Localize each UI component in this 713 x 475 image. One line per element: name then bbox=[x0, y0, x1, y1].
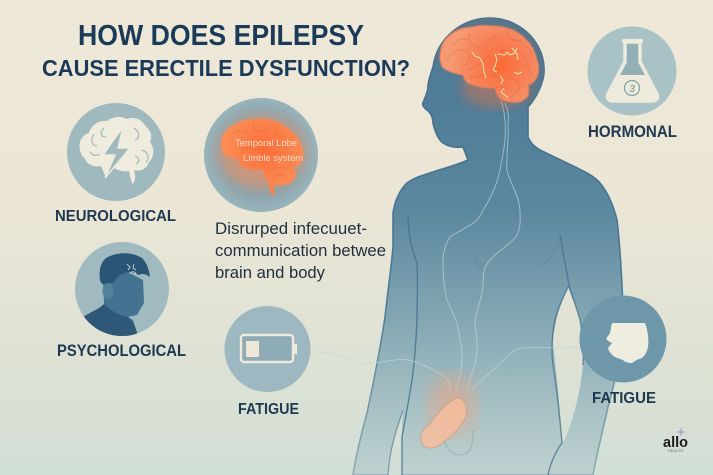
panel: fatigue left bbox=[224, 306, 310, 418]
arm gaps bbox=[553, 287, 583, 445]
logo: allo health: allo bbox=[663, 434, 688, 451]
logo: allo health bbox=[663, 427, 688, 453]
title bbox=[42, 20, 410, 81]
panel: fatigue right bbox=[580, 296, 666, 407]
circle with brain bbox=[204, 98, 318, 212]
label: NEUROLOGICAL bbox=[55, 208, 176, 225]
body silhouette bbox=[353, 18, 624, 475]
icon: low battery bbox=[224, 306, 310, 392]
title: HOW DOES EPILEPSY bbox=[78, 20, 364, 52]
icon: distressed man bbox=[75, 242, 169, 336]
nerve pathways bbox=[312, 100, 580, 393]
icon: fist bbox=[580, 296, 666, 382]
description text: Disrurped infecuuet- bbox=[215, 220, 367, 238]
icon: flask: 3 bbox=[629, 84, 635, 95]
label: HORMONAL bbox=[588, 123, 677, 141]
inner body lines bbox=[388, 217, 583, 475]
panel: temporal lobe bbox=[204, 98, 386, 282]
logo: allo health: HEALTH bbox=[668, 449, 683, 453]
brain folds bbox=[447, 30, 534, 98]
description text: brain and body bbox=[215, 264, 326, 282]
panel: psychological bbox=[57, 242, 186, 360]
title: CAUSE ERECTILE DYSFUNCTION? bbox=[42, 55, 410, 81]
description text bbox=[215, 220, 386, 282]
circle with brain: Limble system bbox=[243, 153, 303, 163]
panel: neurological bbox=[55, 103, 176, 225]
description text: communication betwee bbox=[215, 242, 386, 260]
label: PSYCHOLOGICAL bbox=[57, 342, 186, 360]
label: FATIGUE bbox=[592, 390, 656, 407]
glowing brain bbox=[440, 25, 538, 108]
label: FATIGUE bbox=[238, 401, 299, 418]
circle with brain: Temporal Lobe bbox=[235, 138, 297, 148]
icon: brain with lightning bbox=[67, 103, 165, 201]
seizure sparks bbox=[472, 48, 522, 98]
panel: hormonal bbox=[588, 26, 677, 141]
pelvic organ bbox=[421, 398, 473, 455]
head rim bbox=[433, 18, 544, 107]
groin glow bbox=[428, 375, 476, 435]
human body figure bbox=[312, 18, 624, 475]
